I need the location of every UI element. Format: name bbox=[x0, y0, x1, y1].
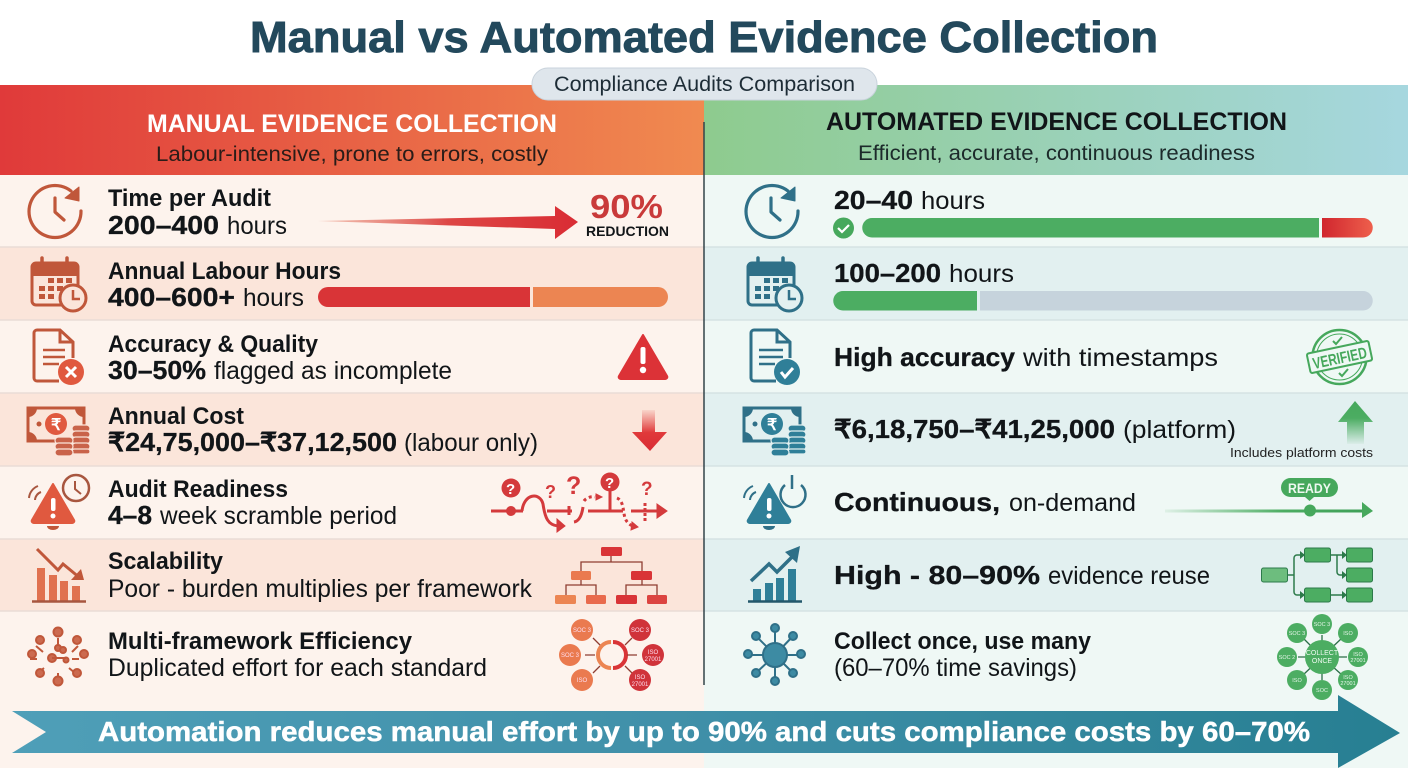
panel: automated background bbox=[704, 175, 1408, 768]
banner arrow: Automation reduces manual effort by up to 90% and cuts compliance costs by 60–70% bbox=[98, 716, 1310, 747]
row: time per audit (manual): hours bbox=[227, 212, 287, 240]
icon: hub network bbox=[744, 624, 805, 685]
question marks: ? bbox=[545, 482, 556, 502]
row: audit readiness (manual): Audit Readiness bbox=[108, 476, 288, 503]
row: annual cost (manual): ₹24,75,000–₹37,12,500 bbox=[108, 427, 397, 457]
row: scalability (automated) bbox=[748, 546, 1372, 602]
row: annual hours (automated): 100–200 bbox=[834, 258, 941, 288]
diagram: duplicated frameworks: 27001 bbox=[645, 657, 662, 663]
arrow: cost up bbox=[1338, 401, 1373, 444]
diagram: collect once hub: 27001 bbox=[1340, 681, 1356, 687]
bar: hours bbox=[833, 291, 1373, 310]
question marks: ? bbox=[506, 481, 515, 498]
row: annual cost (manual): Annual Cost bbox=[108, 403, 244, 430]
header: manual: Labour-intensive, prone to errors, costly bbox=[156, 143, 549, 166]
row: annual cost (automated): (platform) bbox=[1123, 416, 1236, 444]
diagram: collect once hub: SOC bbox=[1316, 688, 1328, 694]
row: annual labour hours (manual) bbox=[32, 258, 668, 312]
row: annual labour hours (manual): hours bbox=[243, 284, 304, 312]
row: time per audit (automated): 20–40 bbox=[834, 185, 913, 215]
diagram: duplicated frameworks: ISO bbox=[648, 650, 658, 656]
question marks: ? bbox=[566, 472, 581, 500]
icon: clock bbox=[746, 185, 798, 237]
row: scalability (manual): Scalability bbox=[108, 548, 224, 575]
row: audit readiness (manual): 4–8 bbox=[108, 500, 152, 530]
row: accuracy (manual) bbox=[34, 330, 667, 385]
row: multi-framework (automated): (60–70% time savings) bbox=[834, 654, 1077, 682]
row: accuracy (manual): 30–50% bbox=[108, 355, 206, 385]
row: annual hours (automated) bbox=[748, 258, 1373, 311]
stat: 90% reduction bbox=[586, 188, 669, 239]
question marks bbox=[506, 472, 653, 502]
icon: clock bbox=[29, 185, 81, 237]
diagram: duplicated frameworks bbox=[559, 619, 664, 691]
diagram: org tree bbox=[555, 547, 667, 604]
row: accuracy (manual): flagged as incomplete bbox=[214, 357, 452, 385]
arrow: cost down bbox=[632, 410, 667, 451]
diagram: collect once hub: ONCE bbox=[1312, 658, 1332, 665]
icon: growth bars bbox=[748, 546, 802, 602]
row: scalability (manual): Poor - burden multiplies per framework bbox=[108, 575, 532, 603]
diagram: ready timeline: READY bbox=[1288, 481, 1331, 496]
stat: 90% reduction: 90% bbox=[590, 188, 663, 225]
row: accuracy (automated): with timestamps bbox=[1022, 344, 1218, 372]
row: readiness (automated): Continuous, bbox=[834, 487, 1000, 517]
icon: money and coins bbox=[28, 408, 90, 456]
diagram: collect once hub: COLLECT bbox=[1306, 650, 1339, 657]
icon: document with check bbox=[751, 330, 800, 385]
row: readiness (automated): on-demand bbox=[1009, 489, 1136, 517]
arrow: reduction bbox=[318, 206, 578, 239]
diagram: reuse flow bbox=[1262, 548, 1372, 602]
row: annual labour hours (manual): 400–600+ bbox=[108, 282, 235, 312]
subtitle pill: Compliance Audits Comparison bbox=[554, 73, 855, 96]
row: readiness (automated) bbox=[744, 475, 1373, 530]
row: multi-framework (manual) bbox=[28, 619, 664, 691]
title: Manual vs Automated Evidence Collection bbox=[250, 13, 1158, 62]
row: annual hours (automated): hours bbox=[949, 260, 1014, 288]
icon: alarm and clock bbox=[29, 475, 89, 530]
row: annual cost (manual) bbox=[28, 403, 667, 457]
stat: 90% reduction: REDUCTION bbox=[586, 223, 669, 239]
diagram: duplicated frameworks: ISO bbox=[635, 675, 645, 681]
icon: alarm and power bbox=[744, 475, 806, 530]
header: manual: MANUAL EVIDENCE COLLECTION bbox=[147, 110, 557, 138]
row: multi-framework (automated) bbox=[744, 614, 1368, 700]
subtitle pill bbox=[532, 68, 877, 100]
icon: fragmented network bbox=[28, 628, 88, 686]
icon: money and coins: ₹ bbox=[767, 417, 777, 434]
icon: calendar bbox=[32, 258, 86, 311]
diagram: collect once hub: ISO bbox=[1343, 675, 1353, 681]
stamp: verified bbox=[1307, 330, 1372, 384]
diagram: duplicated frameworks: SOC 3 bbox=[561, 653, 580, 659]
header: manual bbox=[0, 85, 704, 175]
row: audit readiness (manual): week scramble period bbox=[159, 502, 397, 530]
diagram: collect once hub: 27001 bbox=[1350, 658, 1366, 664]
banner arrow bbox=[12, 695, 1400, 768]
note: platform costs: Includes platform costs bbox=[1230, 445, 1374, 460]
icon: money and coins bbox=[744, 408, 806, 456]
row: annual cost (automated): ₹6,18,750–₹41,25,000 bbox=[834, 414, 1115, 444]
diagram: collect once hub: ISO bbox=[1353, 652, 1363, 658]
diagram: collect once hub: SOC 2 bbox=[1279, 655, 1295, 661]
row: scalability (automated): evidence reuse bbox=[1048, 562, 1210, 590]
diagram: duplicated frameworks: SOC 3 bbox=[631, 628, 650, 634]
diagram: duplicated frameworks: 27001 bbox=[632, 682, 649, 688]
panel: manual background bbox=[0, 175, 704, 768]
diagram: collect once hub: ISO bbox=[1292, 678, 1302, 684]
diagram: collect once hub: SOC 3 bbox=[1289, 631, 1305, 637]
header: automated bbox=[704, 85, 1408, 175]
diagram: duplicated frameworks: ISO bbox=[577, 678, 587, 684]
bar: time bbox=[862, 218, 1373, 238]
diagram: collect once hub bbox=[1277, 614, 1368, 700]
row: multi-framework (automated): Collect once, use many bbox=[834, 628, 1092, 655]
row: multi-framework (manual): Multi-framework Efficiency bbox=[108, 628, 413, 655]
icon: warning triangle bbox=[619, 335, 667, 379]
header: automated: AUTOMATED EVIDENCE COLLECTION bbox=[826, 108, 1287, 136]
row: multi-framework (manual): Duplicated effort for each standard bbox=[108, 654, 487, 682]
diagram: chaotic timeline bbox=[491, 472, 667, 532]
header: automated: Efficient, accurate, continuous readiness bbox=[858, 142, 1255, 165]
row: accuracy (manual): Accuracy & Quality bbox=[108, 331, 319, 358]
diagram: duplicated frameworks: SOC 3 bbox=[573, 628, 592, 634]
icon: declining bars bbox=[32, 549, 86, 602]
row: accuracy (automated) bbox=[751, 330, 1372, 385]
row: time per audit (automated): hours bbox=[921, 187, 985, 215]
bar: labour hours bbox=[318, 287, 668, 307]
question marks: ? bbox=[641, 479, 653, 500]
diagram: collect once hub: SOC 3 bbox=[1314, 622, 1330, 628]
row: annual cost (manual): (labour only) bbox=[404, 429, 538, 457]
row: time per audit (manual): Time per Audit bbox=[108, 185, 271, 212]
row: audit readiness (manual) bbox=[29, 472, 667, 532]
row: time per audit (automated) bbox=[746, 185, 1373, 238]
stamp: verified: VERIFIED bbox=[1311, 345, 1369, 373]
row: scalability (automated): High - 80–90% bbox=[834, 560, 1040, 590]
icon: document with x bbox=[34, 330, 84, 385]
row: accuracy (automated): High accuracy bbox=[834, 342, 1016, 372]
icon: check badge bbox=[833, 218, 854, 238]
question marks: ? bbox=[605, 475, 614, 492]
diagram: ready timeline bbox=[1165, 478, 1373, 518]
row: time per audit (manual): 200–400 bbox=[108, 210, 219, 240]
icon: calendar bbox=[748, 258, 802, 311]
row: annual cost (automated) bbox=[744, 401, 1374, 460]
row: time per audit (manual) bbox=[29, 185, 669, 240]
icon: money and coins: ₹ bbox=[51, 417, 61, 434]
row: scalability (manual) bbox=[32, 547, 667, 604]
row: annual labour hours (manual): Annual Labour Hours bbox=[108, 258, 341, 285]
diagram: collect once hub: ISO bbox=[1343, 631, 1353, 637]
